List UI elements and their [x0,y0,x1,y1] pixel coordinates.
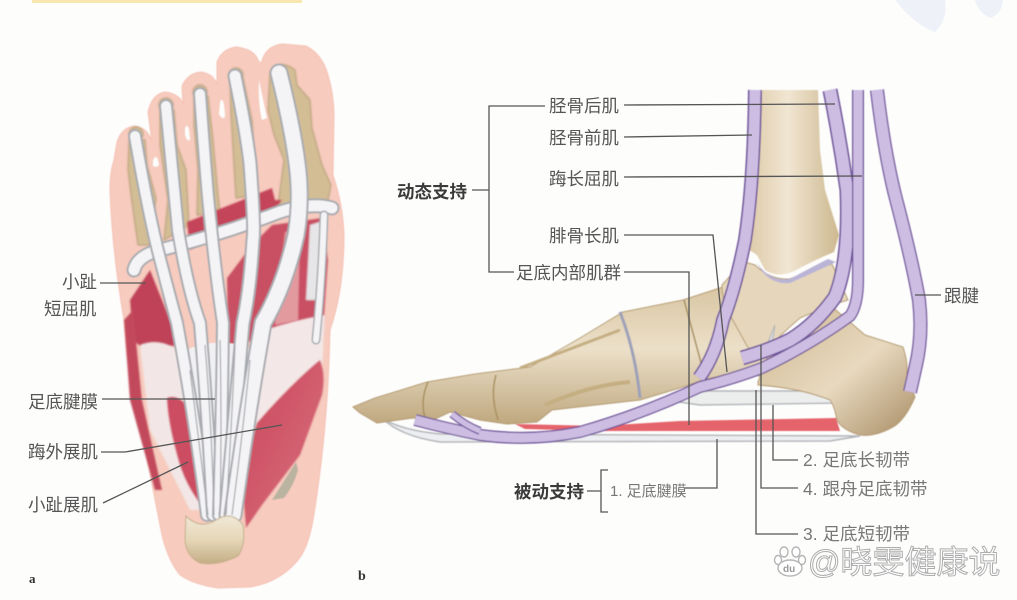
label: 腓骨长肌: 腓骨长肌 [549,226,619,246]
label: 胫骨前肌: 胫骨前肌 [549,128,619,148]
toe tendon branch [452,414,480,431]
label: 4. 跟舟足底韧带: 4. 跟舟足底韧带 [803,479,927,499]
panel letter b: b [358,569,366,584]
leader: 胫骨前肌 [624,135,752,137]
abductor hallucis muscle [243,360,324,528]
panel b: side view of foot [353,90,920,442]
panel a: plantar view of foot [110,44,344,588]
grey lateral bone under heel [272,462,298,500]
bracket: 动态支持 [472,106,545,272]
foot skin silhouette [110,44,344,588]
tibialis anterior tendon [699,90,755,378]
label: 被动支持: 被动支持 [514,482,584,502]
tibia [746,90,839,275]
flexor hallucis longus tendon [415,90,858,438]
label: 小趾展肌: 小趾展肌 [28,495,98,515]
label: 动态支持: 动态支持 [397,182,467,202]
label: 小趾短屈肌 [44,272,97,319]
label: 3. 足底短韧带: 3. 足底短韧带 [803,524,910,544]
ankle cartilage [757,259,836,283]
top strip decoration [32,0,1003,32]
label: 2. 足底长韧带: 2. 足底长韧带 [803,450,910,470]
label: 踇外展肌: 踇外展肌 [28,442,98,462]
bracket: 被动支持 [587,470,608,512]
five plantar fascia strands [135,73,299,515]
forefoot bones [353,287,770,424]
calcaneus [758,305,915,435]
label: 足底腱膜 left: 足底腱膜 [28,392,98,412]
leader: 踇长屈肌 [624,176,862,177]
leader: 踇外展肌 [101,425,282,452]
label: 胫骨后肌: 胫骨后肌 [549,96,619,116]
leader: 足底内部肌群 [624,272,689,425]
heel bone, plantar view [185,516,244,564]
toe gaps [153,80,267,167]
plantar muscles, forefoot [124,218,328,490]
leader: 足底长韧带 [773,405,798,460]
label: 小趾短屈肌: 小趾 [62,272,97,292]
talus [722,262,848,355]
toe and metatarsal bones [128,64,331,245]
watermark: @晓雯健康说 [808,544,1000,580]
leader: 跟舟足底韧带 [761,345,798,488]
leader: 足底短韧带 [756,390,798,534]
leader: 腓骨长肌 [624,235,727,372]
leader: 跟腱 [915,294,941,296]
flexor digitorum brevis, red muscle band [515,418,840,431]
leader: 足底腱膜 left [102,398,215,400]
leader: 胫骨后肌 [624,104,835,105]
ligament, grey-white [745,325,775,358]
transverse band [134,206,332,270]
plantar ligaments, grey bands [382,391,860,442]
abductor digiti minimi muscle [167,397,207,512]
leader: 小趾短屈肌 [100,282,146,284]
central fascia fan [186,342,254,516]
fascia fibre lines [190,340,250,515]
label: 跟腱: 跟腱 [944,286,979,306]
bone joints [423,300,705,420]
label: 1. 足底腱膜: 1. 足底腱膜 [610,483,687,500]
leader: 足底腱膜 right [685,439,717,488]
panel letter a: a [29,571,36,586]
tibialis posterior tendon [742,90,848,358]
icon: paw [774,547,806,576]
label: 足底内部肌群: 足底内部肌群 [516,263,621,283]
watermark: du [783,564,795,575]
transverse muscle red [187,188,282,250]
leader: 小趾展肌 [103,462,188,503]
lateral thin tendon [316,215,324,340]
label: 踇长屈肌: 踇长屈肌 [549,169,619,189]
white fascia sheets [140,315,325,510]
achilles tendon [877,90,920,392]
label: 小趾短屈肌: 短屈肌 [44,299,96,319]
